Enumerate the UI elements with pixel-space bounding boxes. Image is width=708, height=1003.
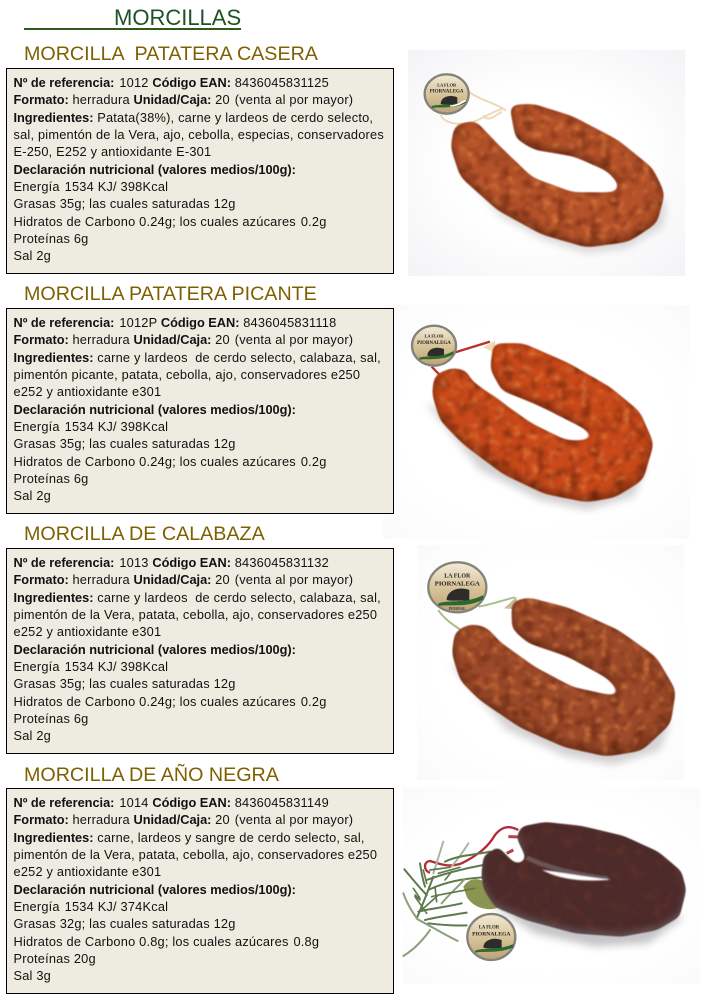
logo: LA FLOR [444, 573, 471, 579]
photo: calabaza [417, 545, 684, 780]
logo: PIORNALEGA [417, 341, 451, 346]
photo: año negra [403, 787, 700, 984]
logo [412, 326, 456, 366]
panel: patatera casera data: Nº de referencia: 1012 Código EAN: 8436045831125 Formato: herradura Unidad/Caja: 20 (venta al por mayor) Ingredientes: Patata(38%), carne y lardeos de cerdo selecto, sal, pimentón de la Vera, ajo, cebolla, especias, conservadores E-250, E252 y antioxidante E-301 Declaración nutricional (valores medios/100g): Energía 1534 KJ/ 398Kcal Grasas 35g; las cuales saturadas 12g Hidratos de Carbono 0.24g; los cuales azúcares 0.2g Proteínas 6g Sal 2g [14, 75, 384, 263]
photo: patatera picante [383, 305, 689, 539]
string [441, 92, 506, 124]
bay leaf [463, 879, 499, 909]
heading: morcilla patatera casera: MORCILLA PATATERA CASERA [24, 43, 318, 65]
title [24, 3, 241, 30]
rosemary [403, 842, 490, 956]
photo: patatera casera [408, 50, 685, 276]
logo: PIORNALEGA [430, 89, 464, 94]
logo [428, 562, 486, 612]
logo [467, 914, 515, 960]
heading: morcilla patatera picante: MORCILLA PATATERA PICANTE [24, 283, 317, 305]
heading: morcilla de año negra: MORCILLA DE AÑO NEGRA [24, 764, 279, 786]
sausage [430, 341, 656, 504]
logo [425, 74, 469, 114]
sausage [449, 102, 667, 249]
panel: calabaza data: Nº de referencia: 1013 Código EAN: 8436045831132 Formato: herradura Unidad/Caja: 20 (venta al por mayor) Ingredientes: carne y lardeos de cerdo selecto, calabaza, sal, pimentón de la Vera, patata, cebolla, ajo, conservadores e250 e252 y antioxidante e301 Declaración nutricional (valores medios/100g): Energía 1534 KJ/ 398Kcal Grasas 35g; las cuales saturadas 12g Hidratos de Carbono 0.24g; los cuales azúcares 0.2g Proteínas 6g Sal 2g [14, 555, 381, 743]
logo: LA FLOR [437, 82, 457, 87]
logo: LA FLOR [425, 333, 444, 338]
logo: PIORNALEGA [472, 931, 511, 937]
sausage [450, 596, 678, 758]
panel: año negra data: Nº de referencia: 1014 Código EAN: 8436045831149 Formato: herradura Unidad/Caja: 20 (venta al por mayor) Ingredientes: carne, lardeos y sangre de cerdo selecto, sal, pimentón de la Vera, patata, cebolla, ajo, conservadores e250 e252 y antioxidante e301 Declaración nutricional (valores medios/100g): Energía 1534 KJ/ 374Kcal Grasas 32g; las cuales saturadas 12g Hidratos de Carbono 0.8g; los cuales azúcares 0.8g Proteínas 20g Sal 3g [14, 795, 377, 983]
logo: LA FLOR [479, 926, 500, 931]
gap between limbs [542, 870, 611, 881]
logo: PIORNAL [449, 607, 466, 611]
string [425, 827, 518, 873]
panel: patatera picante data: Nº de referencia: 1012P Código EAN: 8436045831118 Formato: herradura Unidad/Caja: 20 (venta al por mayor) Ingredientes: carne y lardeos de cerdo selecto, calabaza, sal, pimentón picante, patata, cebolla, ajo, conservadores e250 e252 y antioxidante e301 Declaración nutricional (valores medios/100g): Energía 1534 KJ/ 398Kcal Grasas 35g; las cuales saturadas 12g Hidratos de Carbono 0.24g; los cuales azúcares 0.2g Proteínas 6g Sal 2g [14, 315, 381, 503]
string [438, 597, 515, 631]
upper limb shading [527, 857, 608, 879]
heading: morcilla de calabaza: MORCILLA DE CALABAZA [24, 523, 265, 545]
sausage [480, 821, 688, 938]
logo: PIORNALEGA [435, 580, 480, 587]
string [432, 342, 490, 376]
title: MORCILLAS [114, 5, 241, 30]
